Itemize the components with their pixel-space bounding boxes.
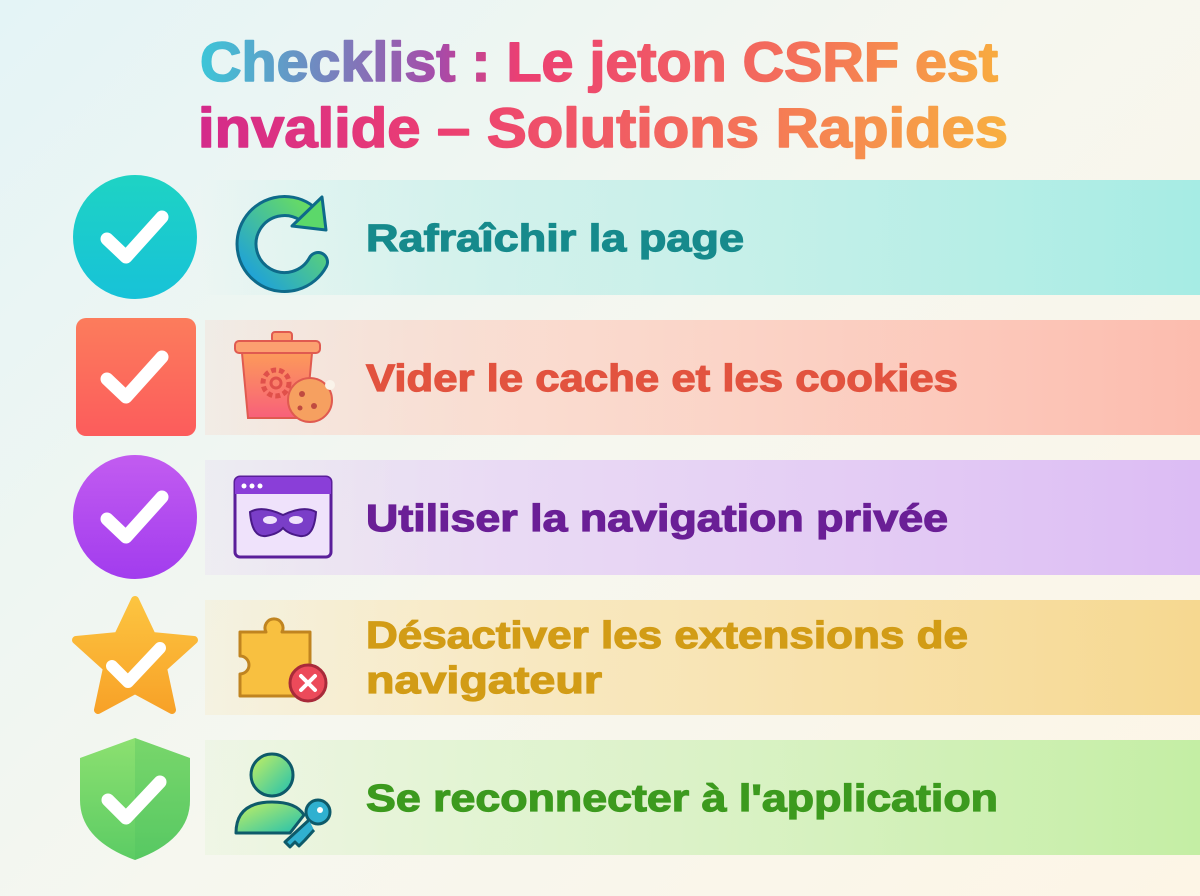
row 5: reconnect — [80, 738, 1200, 860]
text: step 3: Utiliser la navigation privée — [366, 498, 948, 540]
title: invalide – Solutions Rapides — [198, 96, 1008, 159]
icon: puzzle with x — [240, 619, 326, 701]
title — [198, 30, 1008, 159]
row 4: extensions — [76, 600, 1200, 715]
icon: check square red — [76, 318, 196, 436]
row 1: refresh — [73, 175, 1200, 299]
icon: shield check — [80, 738, 190, 860]
row 2: cache — [76, 318, 1200, 436]
row 3: private — [73, 455, 1200, 579]
icon: user with key — [236, 754, 330, 847]
icon: check circle purple — [73, 455, 197, 579]
icon: refresh arrow — [247, 197, 326, 282]
text: step 4 — [366, 615, 968, 702]
icon: trash with gear and cookie — [235, 332, 335, 422]
title: Checklist : Le jeton CSRF est — [200, 30, 998, 93]
icon: check circle teal — [73, 175, 197, 299]
icon: browser with mask — [235, 477, 331, 557]
text: step 1: Rafraîchir la page — [366, 218, 744, 260]
text: step 5: Se reconnecter à l'application — [366, 778, 998, 820]
text: step 2: Vider le cache et les cookies — [366, 358, 958, 400]
text: step 4: Désactiver les extensions de — [366, 615, 968, 657]
text: step 4: navigateur — [366, 660, 602, 702]
icon: star check — [76, 600, 194, 710]
